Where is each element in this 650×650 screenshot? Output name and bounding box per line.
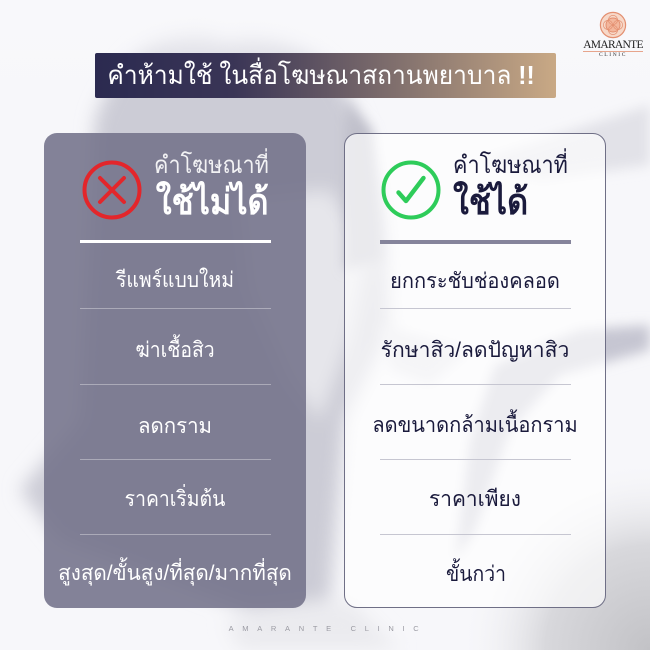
list: allowed	[372, 269, 578, 586]
logo subtitle: CLINIC	[599, 52, 627, 58]
heading: allowed: ใช้ได้	[453, 181, 528, 222]
list: allowed: ราคาเพียง	[429, 487, 521, 511]
logo	[583, 12, 643, 58]
list: allowed: รักษาสิว/ลดปัญหาสิว	[381, 338, 569, 362]
list: not allowed: ราคาเริ่มต้น	[125, 487, 225, 511]
list: allowed: ขั้นกว่า	[446, 562, 506, 586]
footer text: AMARANTE CLINIC	[229, 624, 427, 633]
list: allowed: ลดขนาดกล้ามเนื้อกราม	[372, 413, 578, 437]
heading: allowed	[453, 148, 568, 222]
panel: not allowed	[44, 133, 306, 608]
list: not allowed: สูงสุด/ขั้นสูง/ที่สุด/มากที่สุด	[58, 561, 292, 585]
divider	[80, 240, 271, 243]
panel: allowed	[344, 133, 606, 608]
list: not allowed: ลดกราม	[138, 414, 212, 438]
list: not allowed	[58, 268, 292, 586]
icon: red cross	[82, 160, 142, 220]
icon: logo mandala	[600, 12, 626, 38]
logo wordmark: AMARANTE	[583, 39, 643, 51]
divider	[380, 240, 571, 244]
heading: not allowed	[154, 148, 269, 222]
title banner: คำห้ามใช้ ในสื่อโฆษณาสถานพยาบาล !!	[108, 60, 535, 90]
icon: green check	[382, 160, 440, 220]
heading: not allowed: คำโฆษณาที่	[154, 152, 269, 179]
list: not allowed: ฆ่าเชื้อสิว	[135, 338, 215, 362]
heading: allowed: คำโฆษณาที่	[453, 152, 568, 179]
title banner	[95, 53, 556, 98]
heading: not allowed: ใช้ไม่ได้	[156, 181, 269, 222]
list: not allowed: รีแพร์แบบใหม่	[116, 268, 234, 292]
list: allowed: ยกกระชับช่องคลอด	[390, 269, 560, 293]
